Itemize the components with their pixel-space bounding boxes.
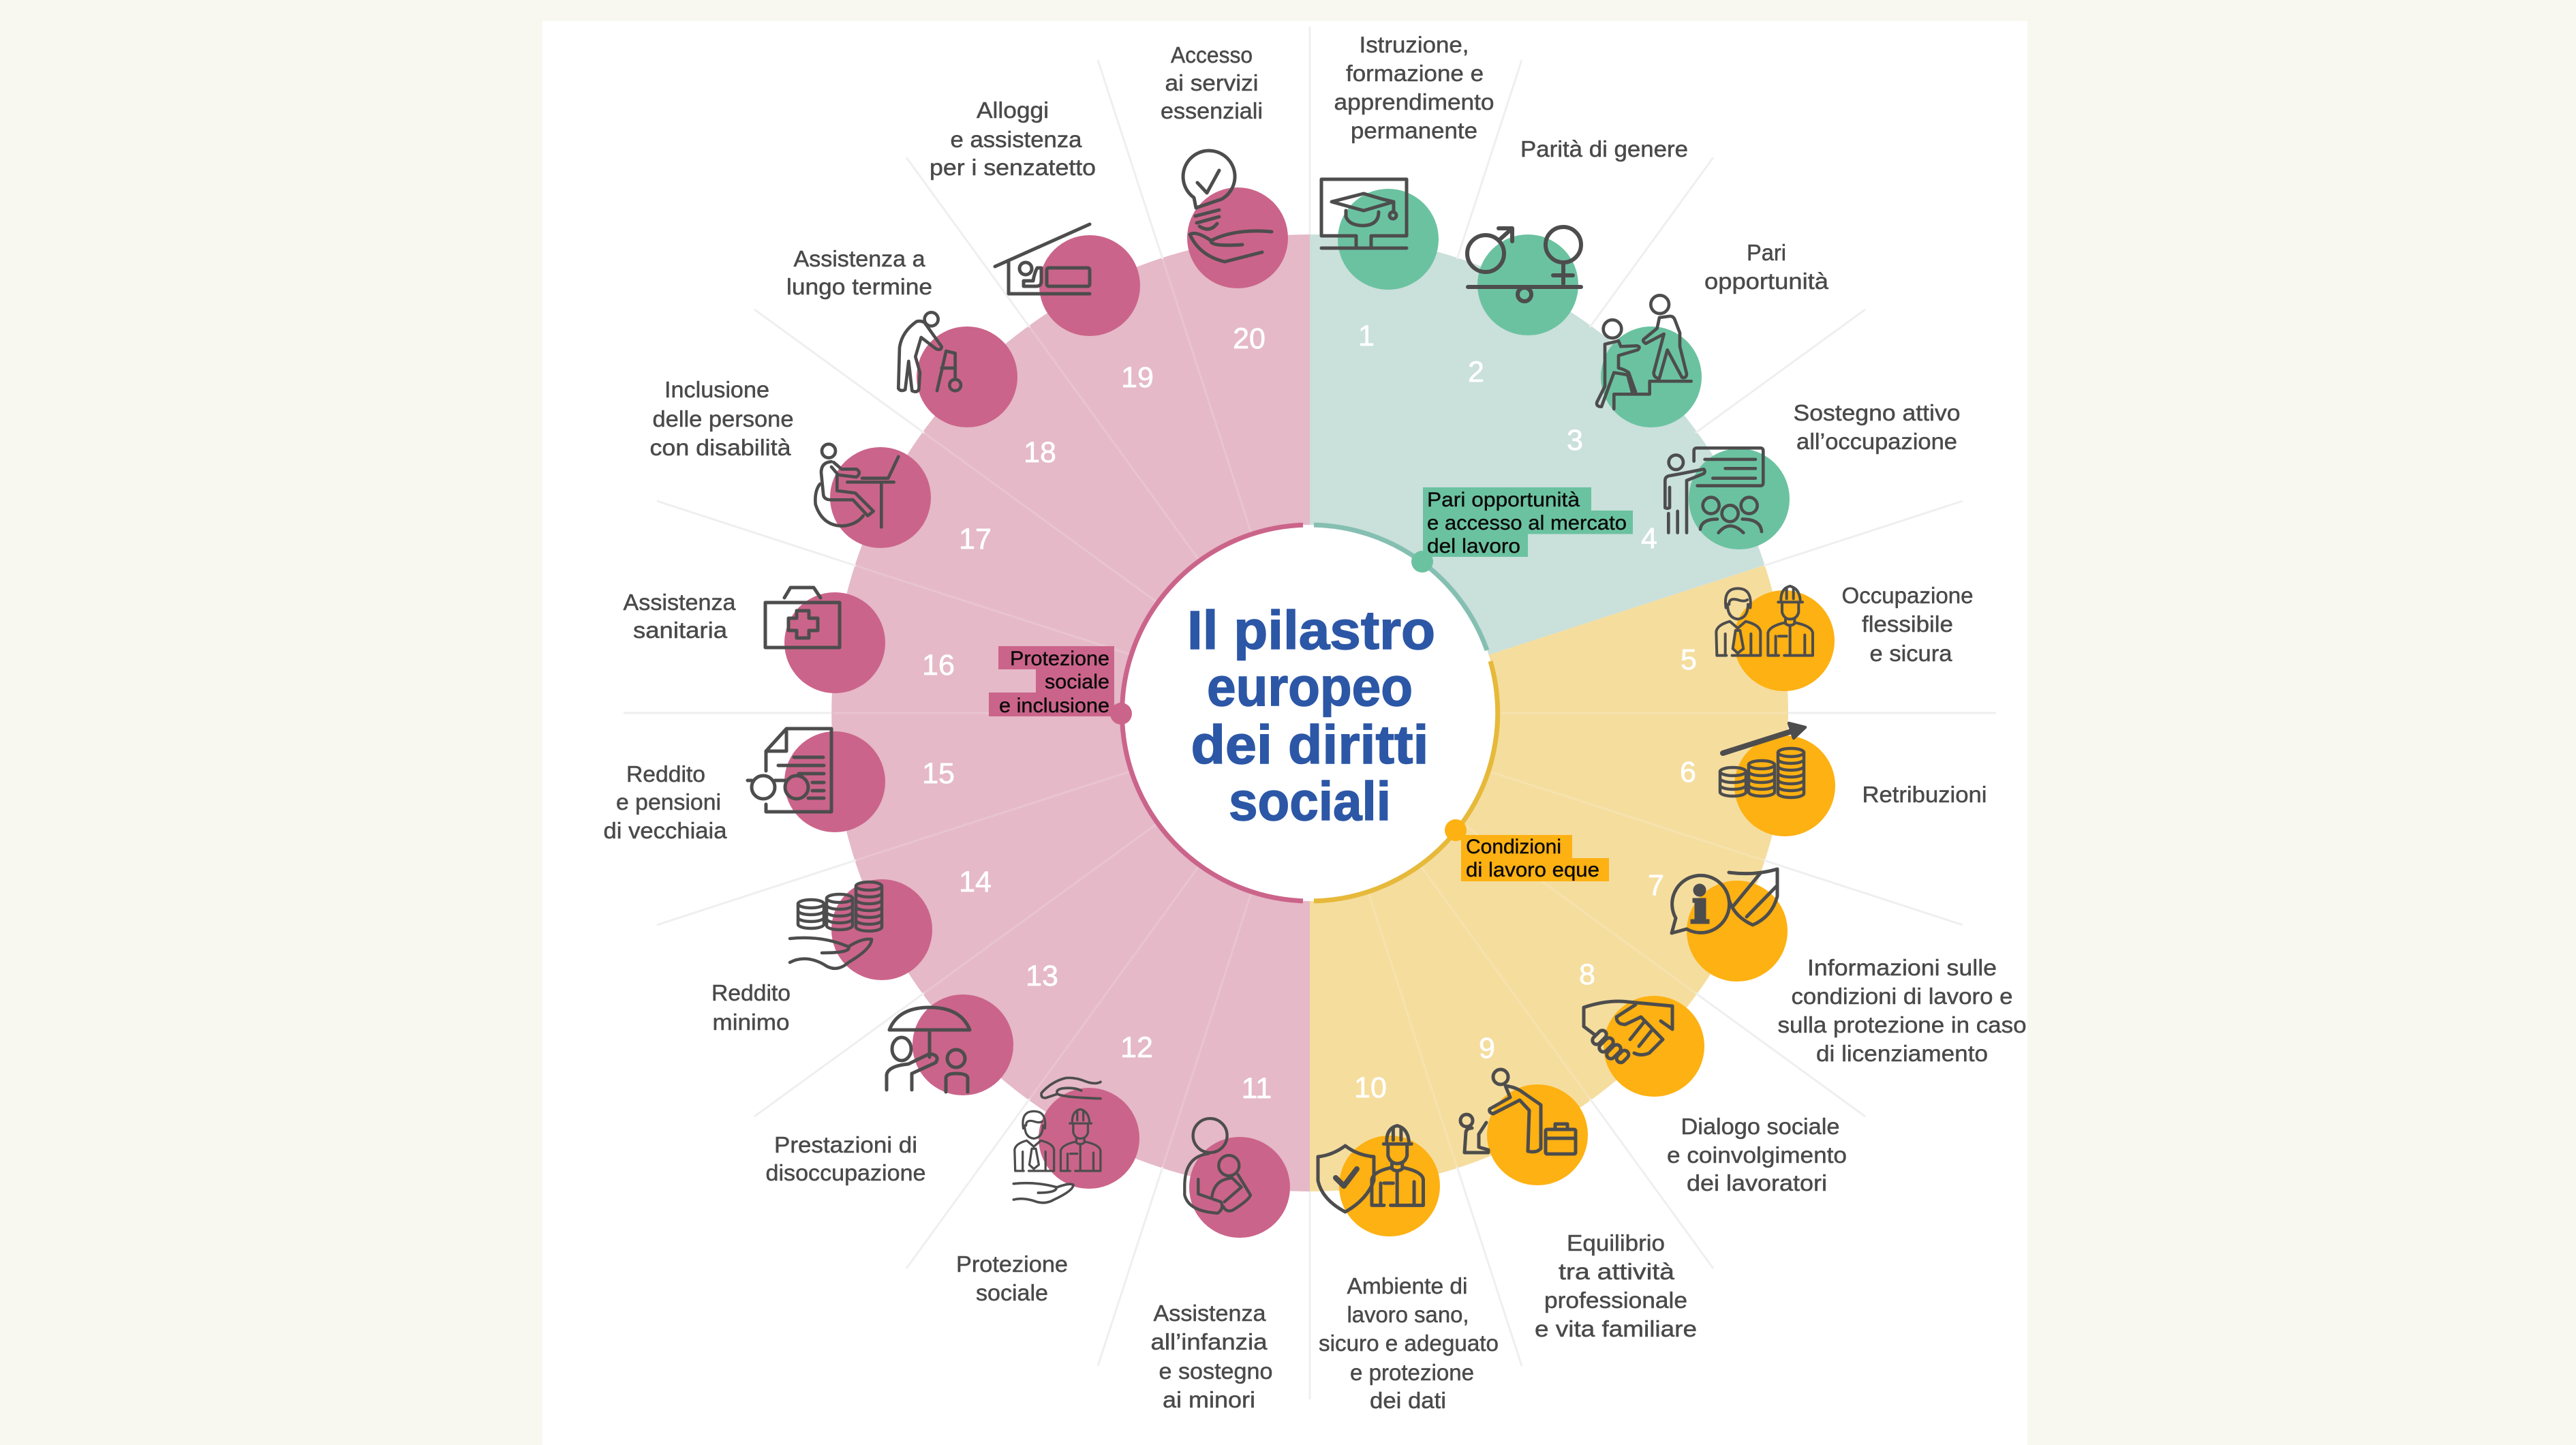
circle 13 [913, 994, 1013, 1095]
wheel: coloured sectors and centre [624, 27, 1996, 1399]
principle 7 [1648, 869, 2027, 1066]
label: Istruzione: permanente [1351, 118, 1477, 143]
principle 12 [956, 1031, 1153, 1305]
label: Accesso ai servizi essenziali: Accesso [1171, 42, 1253, 67]
label: Istruzione: apprendimento [1334, 89, 1494, 115]
icon: person with walker [898, 312, 961, 392]
label: Occupazione flessibile: flessibile [1862, 611, 1953, 637]
callout: Protezione sociale e inclusione: e inclusione [999, 695, 1109, 717]
label: Parità di genere: Parità di genere [1520, 136, 1688, 162]
label: Reddito e pensioni: Reddito [626, 761, 705, 787]
label: Pari opportunità: Pari [1747, 240, 1786, 265]
label: Assistenza a lungo termine: Assistenza a [793, 246, 925, 271]
label: Occupazione flessibile: e sicura [1870, 641, 1952, 666]
label: Assistenza all'infanzia: Assistenza [1153, 1300, 1266, 1326]
label: Assistenza a lungo termine [786, 246, 932, 299]
principle 17 [650, 377, 992, 556]
principle 4 [1641, 400, 1960, 555]
label: Accesso ai servizi essenziali: essenziali [1161, 98, 1263, 123]
label: Ambiente di lavoro: lavoro sano, [1347, 1302, 1469, 1327]
title: dei diritti [1191, 714, 1428, 775]
label: Informazioni: condizioni di lavoro e [1791, 984, 2013, 1009]
callout: Protezione sociale e inclusione: Protezione [1010, 648, 1109, 670]
label: Assistenza all'infanzia: ai minori [1163, 1387, 1255, 1412]
label: Prestazioni di disoccupazione [766, 1132, 925, 1185]
circle 10 [1339, 1136, 1440, 1236]
label: Reddito e pensioni: di vecchiaia [604, 818, 727, 843]
number 16: 16 [922, 649, 955, 682]
label: Inclusione delle persone con disabilità [650, 377, 793, 460]
circle 11 [1189, 1137, 1290, 1238]
icon: people on stairs [1597, 295, 1691, 409]
label: Accesso ai servizi essenziali: ai servizi [1165, 70, 1258, 95]
ring arc pink [1122, 525, 1303, 901]
circle 1 [1338, 189, 1439, 290]
principle 3 [1567, 240, 1829, 457]
label: Ambiente di lavoro: e protezione [1350, 1360, 1474, 1385]
circle 2 [1477, 234, 1578, 335]
label: Equilibrio: professionale [1544, 1288, 1687, 1313]
principle 13 [766, 960, 1058, 1185]
number 13: 13 [1026, 960, 1058, 992]
label: Protezione sociale [956, 1251, 1068, 1305]
label: Reddito e pensioni [604, 761, 727, 843]
principle 6 [1680, 723, 1987, 836]
icon: coins on hand [790, 882, 882, 969]
title: Il pilastro [1187, 600, 1435, 660]
number 4: 4 [1641, 522, 1657, 555]
icon: first aid kit [765, 588, 840, 648]
number 7: 7 [1648, 869, 1664, 902]
label: Alloggi: e assistenza [950, 127, 1082, 152]
number 18: 18 [1024, 436, 1056, 469]
icon: gender balance [1467, 227, 1581, 301]
label: Pari opportunità: opportunità [1704, 269, 1829, 294]
callout: Pari opportunità e accesso al mercato del lavoro: Pari opportunità [1427, 489, 1580, 511]
title [1187, 600, 1435, 832]
icon: parent with child [1184, 1119, 1251, 1213]
principle 11 [1150, 1072, 1290, 1412]
number 1: 1 [1358, 320, 1375, 352]
label: Prestazioni di disoccupazione: disoccupazione [766, 1160, 925, 1185]
label: Assistenza all'infanzia: all’infanzia [1150, 1329, 1268, 1354]
label: Ambiente di lavoro: sicuro e adeguato [1319, 1330, 1499, 1356]
label: Alloggi [930, 97, 1096, 180]
number 11: 11 [1242, 1072, 1272, 1105]
circle 7 [1687, 881, 1788, 982]
number 3: 3 [1567, 424, 1583, 457]
label: Inclusione delle persone con disabilità: con disabilità [650, 435, 791, 460]
label: Ambiente di lavoro: Ambiente di [1347, 1273, 1468, 1298]
principle 16 [623, 588, 955, 693]
label: Accesso ai servizi essenziali [1161, 42, 1263, 123]
icon: graduation cap on monitor [1321, 179, 1407, 248]
label: Inclusione delle persone con disabilità: Inclusione [664, 377, 769, 402]
principle 10 [1318, 1071, 1499, 1413]
circle 3 [1601, 326, 1702, 427]
circle 19 [1039, 235, 1140, 336]
number 19: 19 [1121, 361, 1154, 394]
white panel [542, 21, 2027, 1445]
label: Protezione sociale: sociale [976, 1280, 1048, 1305]
label: Equilibrio: e vita familiare [1535, 1316, 1697, 1341]
principle 18 [786, 246, 1056, 469]
icon: umbrella over people [887, 1007, 970, 1092]
sector: social protection (pink) [831, 234, 1310, 1191]
circle 6 [1734, 735, 1835, 836]
circle 14 [831, 879, 932, 980]
icon: workers protected by hands [1013, 1078, 1101, 1203]
sector: equal opportunities (teal) [1310, 234, 1765, 713]
callout: Pari opportunità e accesso al mercato del lavoro: e accesso al mercato [1427, 512, 1627, 534]
number 20: 20 [1233, 322, 1266, 355]
number 14: 14 [959, 866, 992, 898]
callout: Pari opportunità e accesso al mercato del lavoro [1411, 487, 1633, 573]
icon: shelter with bed [995, 224, 1090, 294]
icon: manager and worker [1716, 586, 1813, 656]
circle 12 [1039, 1088, 1139, 1189]
principle 15 [604, 729, 955, 843]
label: Ambiente di lavoro: dei dati [1370, 1388, 1446, 1413]
number 10: 10 [1354, 1071, 1387, 1104]
label: Istruzione: Istruzione, [1359, 32, 1469, 57]
label: Occupazione flessibile: Occupazione [1841, 583, 1974, 608]
label: Istruzione: formazione e [1346, 61, 1484, 86]
label: Reddito e pensioni: e pensioni [616, 789, 721, 815]
label: Prestazioni di disoccupazione: Prestazioni di [774, 1132, 917, 1157]
callout: Pari opportunità e accesso al mercato del lavoro: del lavoro [1427, 535, 1520, 558]
number 6: 6 [1680, 756, 1696, 789]
icon: presenter and audience [1665, 448, 1763, 533]
number 12: 12 [1120, 1031, 1153, 1064]
label: Dialogo sociale: dei lavoratori [1687, 1170, 1827, 1196]
label: Assistenza all'infanzia [1150, 1300, 1273, 1412]
icon: adult, child and briefcase [1460, 1069, 1576, 1154]
number 17: 17 [959, 523, 992, 556]
circle 16 [784, 592, 885, 693]
label: Assistenza all'infanzia: e sostegno [1159, 1358, 1273, 1384]
label: Assistenza sanitaria [623, 590, 736, 643]
title: europeo [1207, 656, 1413, 717]
principle 14 [711, 866, 992, 1035]
callout: Protezione sociale e inclusione: sociale [1045, 671, 1109, 693]
label: Equilibrio: Equilibrio [1567, 1230, 1665, 1256]
callout: Condizioni di lavoro eque: di lavoro eque [1466, 859, 1599, 881]
icon: light bulb in hand [1183, 151, 1272, 262]
principle 8 [1579, 958, 1847, 1196]
number 2: 2 [1468, 356, 1484, 389]
circle 9 [1487, 1084, 1588, 1185]
label: Sostegno attivo [1794, 400, 1960, 454]
label: Informazioni: sulla protezione in caso [1777, 1012, 2027, 1037]
label: Reddito minimo: minimo [713, 1009, 789, 1035]
label: Pari opportunità [1704, 240, 1829, 294]
label: Retribuzioni: Retribuzioni [1862, 782, 1987, 807]
principle 5 [1681, 583, 1974, 691]
callout: Protezione sociale e inclusione [989, 646, 1132, 725]
icon: wheelchair user at desk [815, 444, 898, 527]
label: Assistenza sanitaria: Assistenza [623, 590, 736, 615]
sector: fair working conditions (yellow) [1310, 565, 1788, 1191]
number 8: 8 [1579, 958, 1595, 991]
title: sociali [1229, 771, 1391, 832]
ring arc yellow [1314, 661, 1498, 901]
label: Occupazione flessibile [1841, 583, 1974, 666]
label: Reddito minimo: Reddito [711, 980, 791, 1005]
callout: Condizioni di lavoro eque: Condizioni [1466, 836, 1561, 858]
label: Assistenza a lungo termine: lungo termine [786, 274, 932, 299]
circle 20 [1187, 187, 1288, 288]
number 15: 15 [922, 757, 955, 790]
icon: information and shield [1672, 869, 1777, 933]
label: Sostegno attivo: all’occupazione [1796, 429, 1957, 454]
principle 20 [1161, 42, 1288, 355]
label: Protezione sociale: Protezione [956, 1251, 1068, 1277]
icon: handshake [1584, 1001, 1672, 1064]
label: Reddito minimo [711, 980, 791, 1035]
label: Dialogo sociale: Dialogo sociale [1681, 1114, 1840, 1139]
circle 17 [830, 447, 931, 548]
label: Inclusione delle persone con disabilità: delle persone [653, 406, 793, 431]
circle 8 [1604, 996, 1704, 1097]
label: Alloggi: Alloggi [977, 97, 1049, 123]
circle 15 [784, 731, 885, 832]
circle 5 [1734, 590, 1835, 691]
number 5: 5 [1681, 643, 1697, 676]
icon: document and glasses [748, 729, 831, 812]
icon: shield and worker [1318, 1125, 1423, 1212]
label: Dialogo sociale: e coinvolgimento [1667, 1142, 1847, 1168]
icon: coins and rising arrow [1720, 723, 1805, 797]
principle 19 [930, 97, 1154, 394]
label: Equilibrio: tra attività [1559, 1259, 1675, 1284]
label: Informazioni: Informazioni sulle [1807, 955, 1997, 980]
centre circle [1122, 525, 1498, 901]
label: Informazioni: di licenziamento [1816, 1041, 1988, 1066]
principle 9 [1460, 1032, 1697, 1341]
label: Sostegno attivo: Sostegno attivo [1794, 400, 1960, 425]
circle 18 [917, 326, 1017, 427]
label: Ambiente di lavoro [1319, 1273, 1499, 1413]
callout: Condizioni di lavoro eque [1445, 819, 1609, 881]
label: Alloggi: per i senzatetto [930, 155, 1096, 180]
label: Istruzione [1334, 32, 1494, 143]
ring arc teal [1314, 525, 1487, 650]
principle 1 [1321, 32, 1494, 352]
principle 2 [1467, 136, 1688, 389]
label: Assistenza sanitaria: sanitaria [633, 618, 728, 643]
number 9: 9 [1479, 1032, 1495, 1065]
label: Informazioni [1777, 955, 2027, 1066]
circle 4 [1689, 448, 1790, 549]
label: Equilibrio [1535, 1230, 1697, 1341]
label: Dialogo sociale [1667, 1114, 1847, 1196]
